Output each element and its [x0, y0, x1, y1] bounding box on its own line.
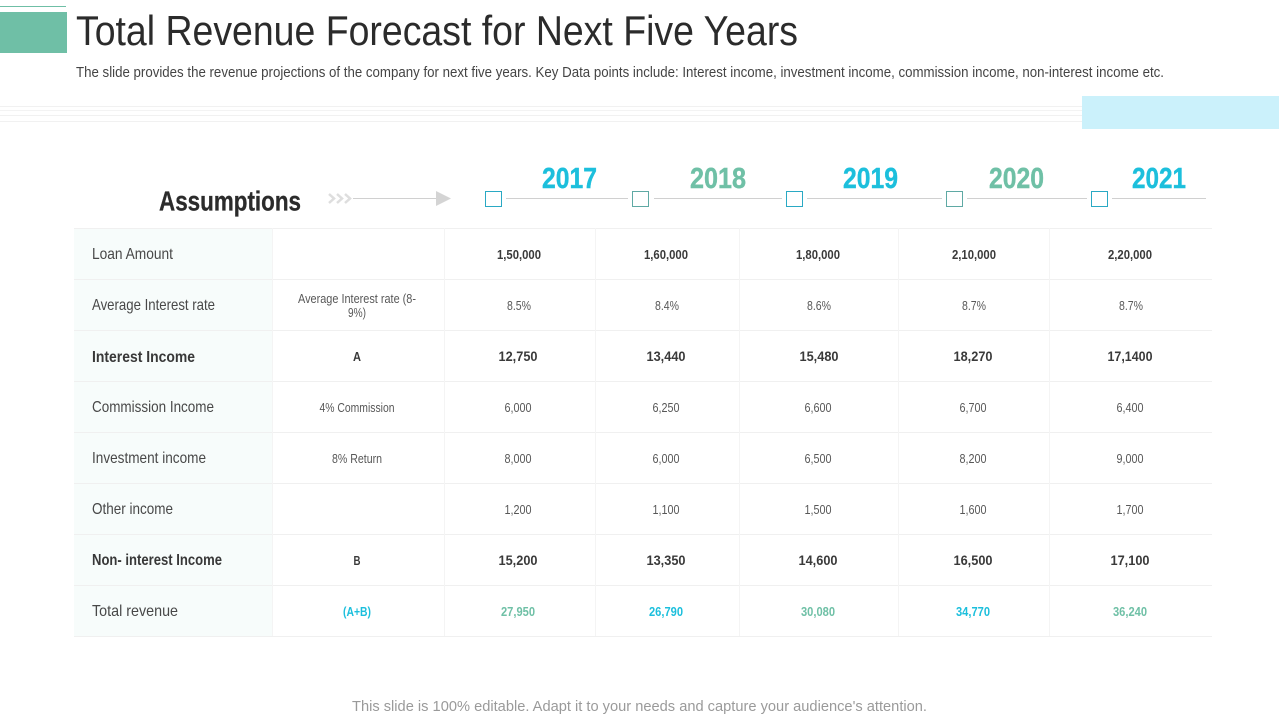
row: Average Interest rate: 8.7% [1119, 299, 1143, 313]
row: Total revenue: Total revenue [92, 603, 178, 620]
row: Average Interest rate [92, 292, 1143, 320]
row: Other income: 1,600 [960, 503, 987, 517]
row: Investment income [92, 450, 1144, 467]
row: Commission Income: 4% Commission [320, 401, 395, 415]
row: Other income [92, 501, 1144, 518]
title: Total Revenue Forecast for Next Five Years [76, 7, 798, 54]
row: Investment income: 9,000 [1116, 452, 1144, 466]
row: Non-interest Income: 17,100 [1110, 552, 1150, 568]
table [74, 228, 1212, 637]
year marker: 2017: 2017 [542, 163, 597, 195]
year marker: 2018 [632, 163, 746, 206]
year marker: 2017 [486, 163, 597, 206]
row: Average Interest rate: Average Interest rate [92, 297, 215, 314]
row: Loan Amount: 1,60,000 [644, 247, 688, 262]
row: Non-interest Income: 16,500 [954, 552, 993, 568]
row: Total revenue [92, 603, 1147, 620]
row: Other income: 1,200 [504, 503, 532, 517]
row: Total revenue: 26,790 [649, 605, 683, 619]
row: Investment income: 8,200 [960, 452, 987, 466]
row: Non-interest Income: B [354, 553, 360, 568]
row: Investment income: 6,500 [804, 452, 832, 466]
row: Other income: 1,500 [804, 503, 832, 517]
row: Non-interest Income: 14,600 [798, 552, 838, 568]
header stripes and light blue band [0, 96, 1279, 129]
row: Loan Amount: 2,10,000 [952, 247, 996, 262]
row: Investment income: 8% Return [332, 452, 382, 466]
row: Investment income: Investment income [92, 450, 206, 467]
row: Commission Income: Commission Income [92, 399, 214, 416]
row: Interest Income: 17,1400 [1108, 348, 1153, 364]
row: Interest Income: Interest Income [92, 349, 195, 366]
year marker: 2020: 2020 [989, 163, 1044, 195]
row: Average Interest rate: Average Interest rate (8- [298, 292, 416, 306]
footer note: This slide is 100% editable. Adapt it to your needs and capture your audience's attention. [352, 698, 927, 715]
row: Commission Income: 6,700 [960, 401, 987, 415]
year marker: 2021: 2021 [1132, 163, 1186, 195]
row: Interest Income: 13,440 [646, 348, 686, 364]
row: Interest Income: A [353, 349, 362, 364]
row: Interest Income: 12,750 [498, 348, 538, 364]
timeline [486, 163, 1206, 206]
row: Non-interest Income [92, 552, 1150, 569]
row: Total revenue: 34,770 [956, 605, 990, 619]
row: Interest Income [92, 348, 1153, 366]
row: Other income: Other income [92, 501, 173, 518]
row: Other income: 1,700 [1116, 503, 1144, 517]
row: Total revenue: 27,950 [501, 605, 535, 619]
row: Commission Income: 6,600 [804, 401, 832, 415]
row: Average Interest rate: 8.6% [807, 299, 831, 313]
header accent block [0, 6, 67, 53]
year marker: 2021 [1092, 163, 1186, 206]
arrow: assumptions to timeline [329, 191, 451, 206]
year marker: 2019 [786, 163, 898, 206]
row: Average Interest rate: 8.5% [507, 299, 531, 313]
row: Loan Amount: 2,20,000 [1108, 247, 1152, 262]
heading: Assumptions: Assumptions [159, 186, 301, 216]
year marker: 2020 [946, 163, 1044, 206]
row: Loan Amount [92, 246, 1152, 263]
row: Commission Income: 6,000 [504, 401, 532, 415]
row: Loan Amount: 1,80,000 [796, 247, 840, 262]
row: Loan Amount: Loan Amount [92, 246, 173, 263]
subtitle: The slide provides the revenue projections of the company for next five years. Key Data points include: Interest income, investment income, commission income, non-interest income etc. [76, 64, 1164, 81]
row: Total revenue: 30,080 [801, 605, 835, 619]
row: Investment income: 6,000 [652, 452, 680, 466]
row: Commission Income: 6,400 [1116, 401, 1144, 415]
row: Other income: 1,100 [652, 503, 680, 517]
row: Average Interest rate: 8.7% [962, 299, 986, 313]
row: Commission Income [92, 399, 1144, 416]
row: Loan Amount: 1,50,000 [497, 247, 541, 262]
row: Non-interest Income: 13,350 [646, 552, 686, 568]
row: Investment income: 8,000 [504, 452, 532, 466]
row: Total revenue: (A+B) [343, 605, 371, 619]
row: Non-interest Income: Non- interest Income [92, 552, 222, 569]
year marker: 2019: 2019 [843, 163, 898, 195]
row: Total revenue: 36,240 [1113, 605, 1147, 619]
row: Average Interest rate: 8.4% [655, 299, 679, 313]
row: Commission Income: 6,250 [652, 401, 680, 415]
row: Interest Income: 15,480 [800, 348, 839, 364]
row: Average Interest rate: 9%) [348, 306, 366, 320]
row: Non-interest Income: 15,200 [498, 552, 538, 568]
row: Interest Income: 18,270 [954, 348, 993, 364]
year marker: 2018: 2018 [690, 163, 746, 195]
